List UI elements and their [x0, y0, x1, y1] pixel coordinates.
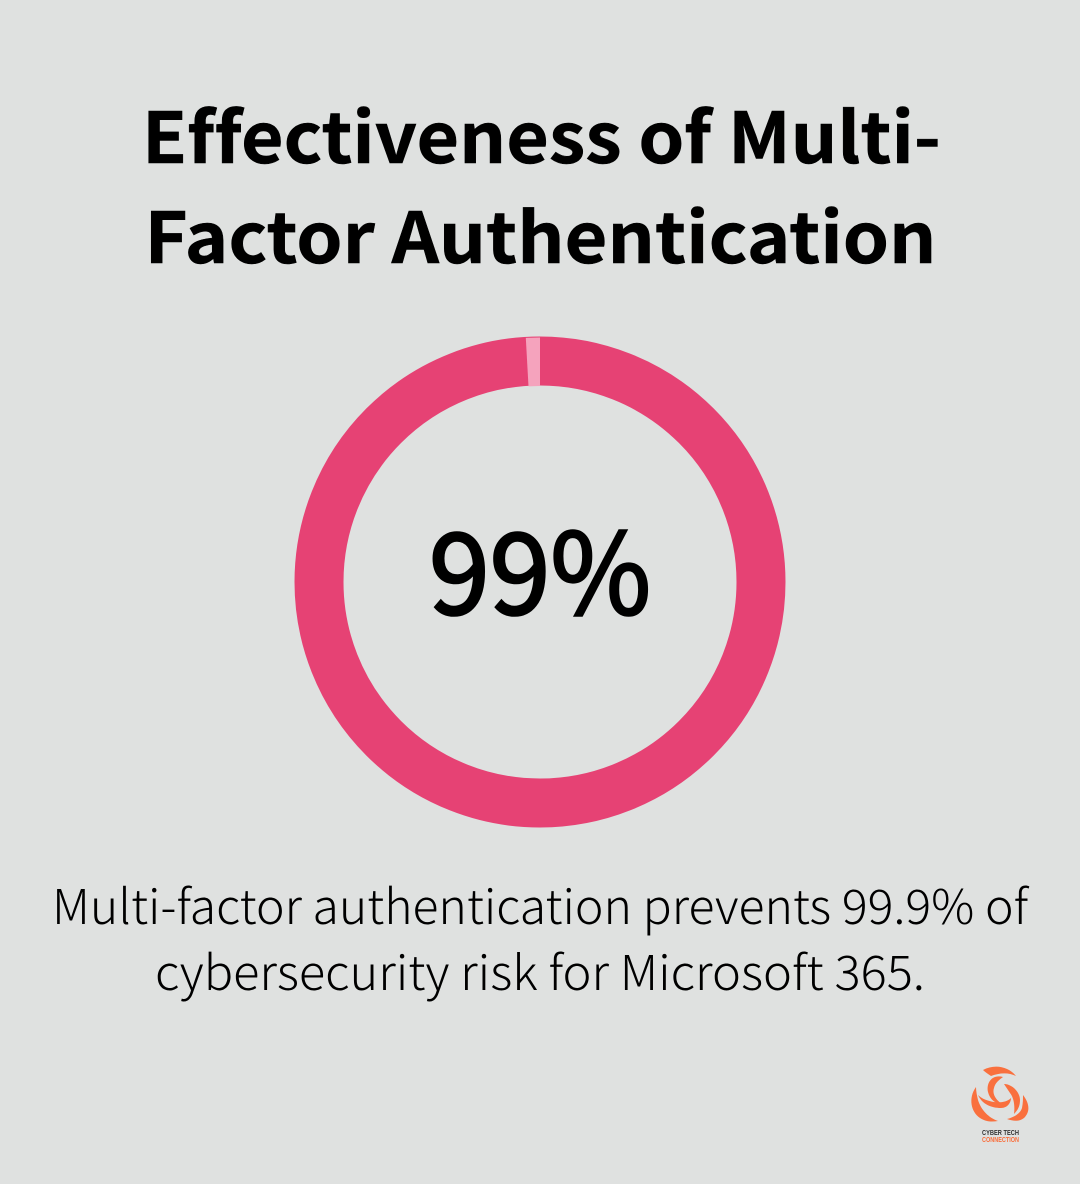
title: Effectiveness of Multi- — [142, 83, 941, 184]
logo: Cyber Tech Connection — [971, 1067, 1028, 1144]
center value: 99% — [429, 485, 651, 647]
description text — [52, 868, 1030, 1004]
description text: Multi-factor authentication prevents 99.9% of — [52, 868, 1030, 938]
remaining segment — [526, 338, 540, 386]
title: Factor Authentication — [144, 183, 936, 284]
donut chart: 99% — [319, 338, 761, 803]
title — [142, 83, 941, 284]
logo icon: three swirl blades — [971, 1067, 1028, 1122]
logo: Cyber Tech Connection: CONNECTION — [982, 1137, 1019, 1144]
logo wordmark: CYBER TECH — [982, 1130, 1019, 1137]
description text: cybersecurity risk for Microsoft 365. — [155, 934, 925, 1004]
